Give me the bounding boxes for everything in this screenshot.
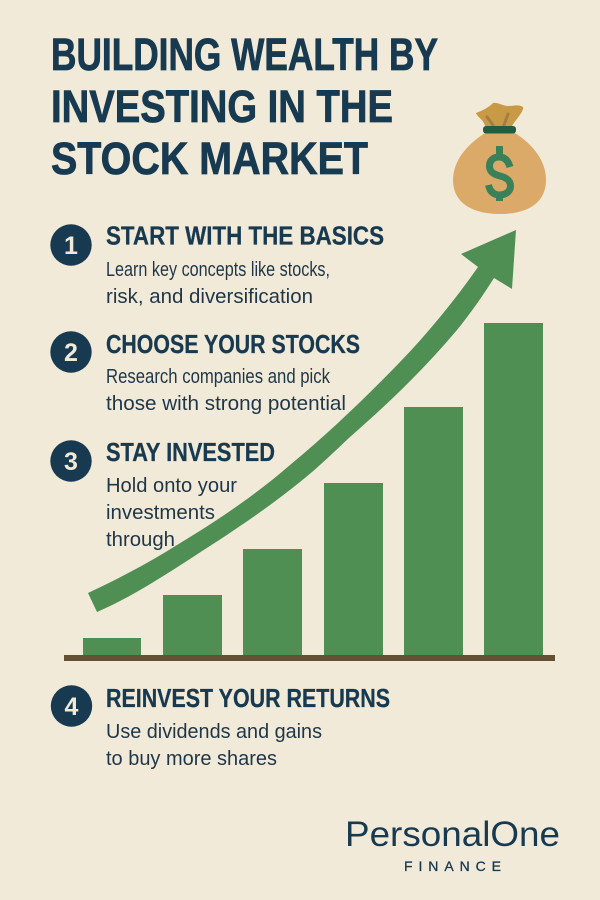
logo: PersonalOne xyxy=(345,815,560,854)
step 1 heading: START WITH THE BASICS xyxy=(106,220,384,250)
arrow: growth xyxy=(88,230,516,612)
icon: money bag xyxy=(453,103,546,214)
number badge 1 xyxy=(50,224,92,266)
title: STOCK MARKET xyxy=(51,133,368,184)
step 3 text: Hold onto your xyxy=(106,474,237,497)
step 2 text: Research companies and pick xyxy=(106,365,331,388)
step 1 text: Learn key concepts like stocks, xyxy=(106,258,330,281)
step 2 text xyxy=(106,365,346,415)
number badge 4: 4 xyxy=(65,693,79,721)
step 3 heading: STAY INVESTED xyxy=(106,437,275,467)
number badge 1: 1 xyxy=(64,232,78,260)
step 4 xyxy=(51,683,390,770)
step 4 text: to buy more shares xyxy=(106,747,277,770)
step 1 xyxy=(50,220,384,308)
step 1 text: risk, and diversification xyxy=(106,285,313,308)
step 2 text: those with strong potential xyxy=(106,392,346,415)
number badge 2: 2 xyxy=(64,339,78,367)
step 3 xyxy=(50,437,275,551)
logo: FINANCE xyxy=(404,858,501,874)
icon: dollar sign xyxy=(488,146,510,201)
step 2 heading: CHOOSE YOUR STOCKS xyxy=(106,329,360,359)
step 4 text: Use dividends and gains xyxy=(106,720,322,743)
number badge 4 xyxy=(51,685,92,727)
bar chart xyxy=(64,323,555,661)
step 4 heading: REINVEST YOUR RETURNS xyxy=(106,683,390,713)
step 1 text xyxy=(106,258,330,308)
step 2 xyxy=(50,329,360,415)
step 3 text xyxy=(106,474,237,551)
title: INVESTING IN THE xyxy=(51,81,393,132)
title: BUILDING WEALTH BY xyxy=(51,29,438,80)
number badge 3 xyxy=(50,440,92,482)
number badge 3: 3 xyxy=(64,448,78,476)
logo xyxy=(345,815,560,874)
number badge 2 xyxy=(50,331,92,373)
step 4 text xyxy=(106,720,322,770)
step 3 text: investments xyxy=(106,501,215,524)
title xyxy=(51,29,438,184)
step 3 text: through xyxy=(106,528,175,551)
